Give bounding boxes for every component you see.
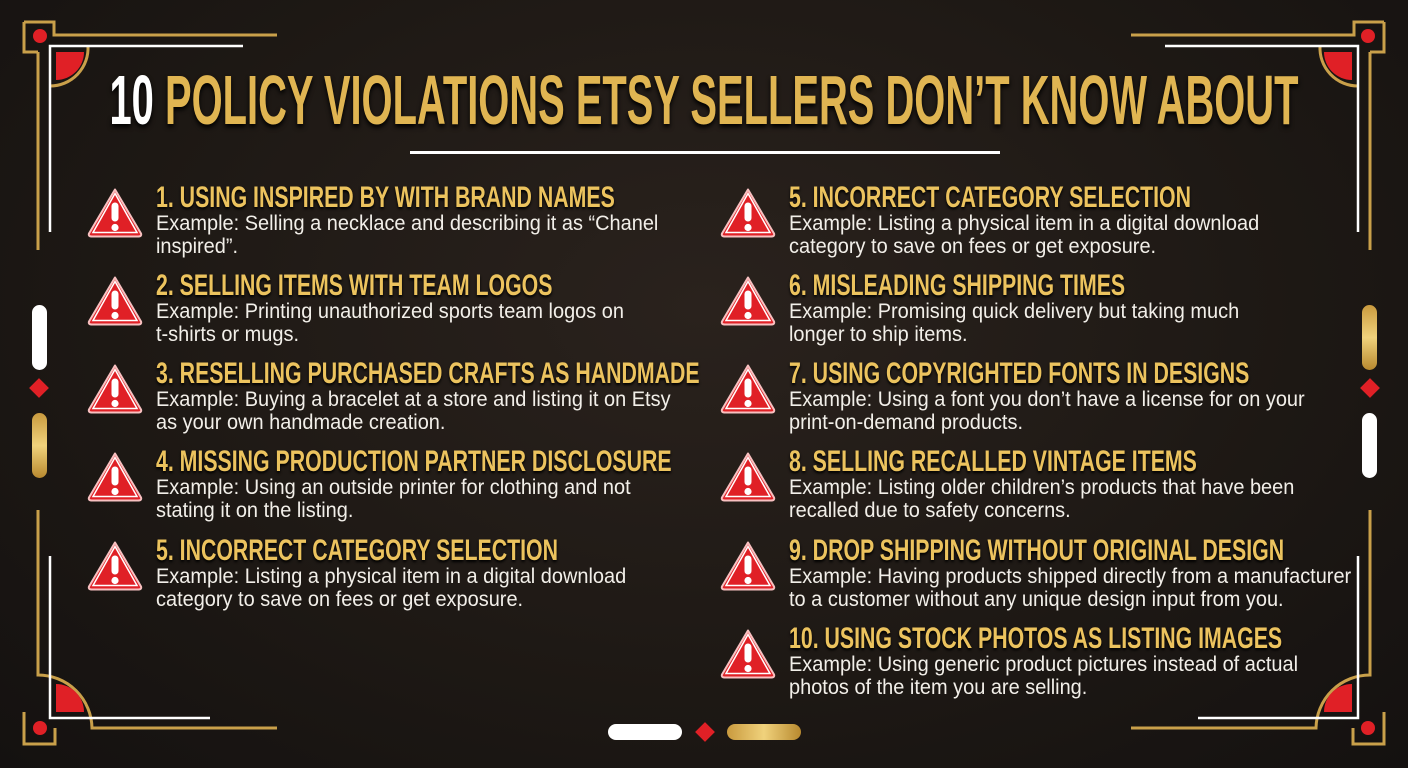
item 2: t-shirts or mugs. — [156, 323, 299, 346]
item 3: Example: Buying a bracelet at a store and listing it on Etsy — [156, 388, 671, 411]
item 6: 6. MISLEADING SHIPPING TIMES — [789, 269, 1125, 302]
item 4: 4. MISSING PRODUCTION PARTNER DISCLOSURE — [156, 445, 672, 478]
item 3: 3. RESELLING PURCHASED CRAFTS AS HANDMADE — [156, 357, 700, 390]
title: 10 POLICY VIOLATIONS ETSY SELLERS DON’T KNOW ABOUT — [109, 61, 1299, 139]
item 6: Example: Promising quick delivery but taking much — [789, 300, 1239, 323]
item 5 left: Example: Listing a physical item in a digital download — [156, 565, 626, 588]
item 5 right: 5. INCORRECT CATEGORY SELECTION — [789, 181, 1191, 214]
item 8 — [720, 445, 1294, 522]
item 9: 9. DROP SHIPPING WITHOUT ORIGINAL DESIGN — [789, 534, 1284, 567]
item 5 left: category to save on fees or get exposure. — [156, 588, 523, 611]
item 3: as your own handmade creation. — [156, 411, 445, 434]
item 10 — [720, 622, 1298, 699]
item 9: Example: Having products shipped directly from a manufacturer — [789, 565, 1351, 588]
item 5 right: category to save on fees or get exposure. — [789, 235, 1156, 258]
item 1: Example: Selling a necklace and describing it as “Chanel — [156, 212, 658, 235]
item 1 — [88, 181, 658, 258]
item 7: Example: Using a font you don’t have a license for on your — [789, 388, 1305, 411]
item 4 — [88, 445, 672, 522]
item 2 — [88, 269, 624, 346]
item 4: Example: Using an outside printer for clothing and not — [156, 476, 631, 499]
item 2: Example: Printing unauthorized sports team logos on — [156, 300, 624, 323]
item 6: longer to ship items. — [789, 323, 968, 346]
item 10: 10. USING STOCK PHOTOS AS LISTING IMAGES — [789, 622, 1282, 655]
item 10: photos of the item you are selling. — [789, 676, 1087, 699]
item 8: recalled due to safety concerns. — [789, 499, 1071, 522]
item 8: Example: Listing older children’s products that have been — [789, 476, 1294, 499]
item 5 right: Example: Listing a physical item in a digital download — [789, 212, 1259, 235]
item 3 — [88, 357, 700, 434]
item 2: 2. SELLING ITEMS WITH TEAM LOGOS — [156, 269, 552, 302]
item 4: stating it on the listing. — [156, 499, 353, 522]
item 5 right — [720, 181, 1259, 258]
item 9 — [720, 534, 1351, 611]
item 6 — [720, 269, 1239, 346]
item 9: to a customer without any unique design input from you. — [789, 588, 1284, 611]
item 10: Example: Using generic product pictures instead of actual — [789, 653, 1298, 676]
item 1: inspired”. — [156, 235, 238, 258]
item 7: 7. USING COPYRIGHTED FONTS IN DESIGNS — [789, 357, 1249, 390]
item 1: 1. USING INSPIRED BY WITH BRAND NAMES — [156, 181, 615, 214]
item 7 — [720, 357, 1305, 434]
item 8: 8. SELLING RECALLED VINTAGE ITEMS — [789, 445, 1197, 478]
item 5 left: 5. INCORRECT CATEGORY SELECTION — [156, 534, 558, 567]
item 5 left — [88, 534, 626, 611]
item 7: print-on-demand products. — [789, 411, 1023, 434]
